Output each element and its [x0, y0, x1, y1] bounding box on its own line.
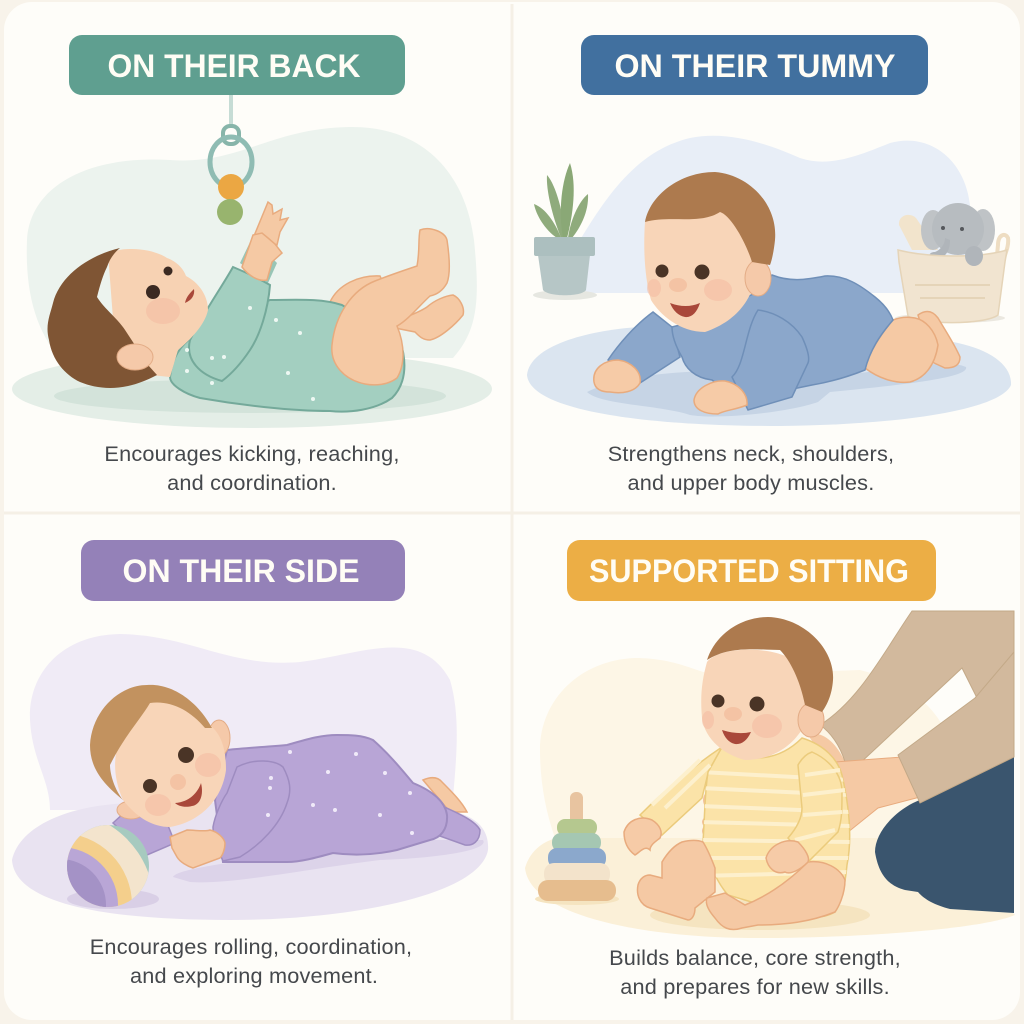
hands [624, 818, 661, 855]
right leg [706, 862, 845, 930]
thigh [865, 317, 938, 382]
ear [745, 260, 771, 296]
ear [117, 344, 153, 370]
background blob [30, 634, 457, 810]
heading: supported sitting: SUPPORTED SITTING [589, 553, 909, 589]
left arm [640, 747, 722, 835]
sweater lower arm [898, 652, 1014, 803]
icon: stacking rings [535, 792, 619, 905]
floor shadow [650, 900, 870, 930]
front hand [242, 233, 282, 280]
nose [669, 278, 687, 292]
caption: Encourages rolling, coordination, [90, 934, 412, 959]
mouth [175, 783, 202, 807]
lower foot sleeve [437, 805, 480, 845]
face [644, 194, 758, 332]
upper arm [213, 761, 290, 861]
onesie [170, 300, 404, 412]
nose [170, 774, 186, 790]
caption: Builds balance, core strength, [609, 945, 901, 970]
floor mat [525, 838, 1015, 938]
floor mat [12, 350, 492, 428]
baby sitting [624, 617, 850, 930]
eyes [143, 779, 157, 793]
baby on side [90, 685, 480, 868]
caption: and upper body muscles. [628, 470, 874, 495]
baby on back [48, 202, 463, 412]
floor mat [527, 327, 1011, 426]
nose [724, 707, 742, 721]
back leg [330, 276, 463, 340]
dots [266, 750, 414, 835]
eyes [712, 694, 724, 708]
heading: on their back [69, 35, 405, 95]
caption: and coordination. [167, 470, 337, 495]
caption: and exploring movement. [130, 963, 378, 988]
right arm [788, 752, 842, 862]
floor mat [12, 802, 488, 920]
onesie dots [185, 306, 315, 401]
mouth [722, 730, 751, 744]
eyes [146, 285, 160, 299]
back arm [113, 812, 175, 855]
background blob [27, 127, 477, 358]
mouth [185, 289, 194, 303]
caption: Encourages kicking, reaching, [104, 441, 400, 466]
foot [423, 778, 467, 812]
panel: on their side [0, 540, 488, 999]
panel: on their tummy [527, 35, 1011, 495]
mouth [670, 303, 700, 317]
arm sleeve [189, 267, 270, 381]
jeans [875, 757, 1014, 913]
body [215, 735, 447, 862]
adult caregiver [702, 611, 1014, 913]
stripes [700, 772, 850, 876]
face [115, 698, 226, 827]
panel: supported sitting [525, 540, 1015, 999]
ear [798, 703, 824, 737]
left leg [638, 840, 715, 920]
caption: and prepares for new skills. [620, 974, 890, 999]
baby on tummy [594, 172, 960, 414]
background blob [580, 136, 970, 293]
caption: Strengthens neck, shoulders, [608, 441, 894, 466]
background blob [540, 658, 960, 838]
foot [918, 312, 960, 368]
face [701, 650, 811, 760]
hair [48, 248, 157, 388]
heading: on their tummy [581, 35, 928, 95]
hands [594, 360, 640, 393]
ears [208, 720, 230, 756]
front leg [332, 229, 449, 385]
back hand [254, 202, 288, 245]
back hand [808, 734, 845, 775]
onesie [703, 738, 850, 917]
cheek [146, 298, 180, 324]
icon: potted plant [533, 163, 597, 300]
cheeks [704, 279, 732, 301]
icon: hanging toy [210, 95, 252, 225]
hair [645, 172, 775, 265]
face [108, 249, 208, 377]
floor shadow [173, 840, 484, 882]
front arm [732, 310, 809, 410]
icon: striped ball [67, 825, 149, 907]
icon: basket with elephant [895, 203, 1008, 323]
body [672, 275, 893, 400]
heading: on their side: ON THEIR SIDE [122, 553, 360, 589]
floor shadow [587, 364, 966, 417]
sweater torso and upper arm [820, 611, 1014, 765]
hand [170, 830, 225, 868]
heading: on their back: ON THEIR BACK [108, 48, 360, 84]
fingers [702, 791, 798, 837]
heading: on their tummy: ON THEIR TUMMY [614, 48, 896, 84]
heading: on their side [81, 540, 405, 601]
cheeks [752, 714, 782, 738]
cheeks [195, 753, 221, 777]
heading: supported sitting [567, 540, 936, 601]
back sleeve [240, 238, 277, 283]
eyes [656, 264, 668, 278]
left arm [608, 312, 680, 383]
hair [90, 685, 212, 800]
panel: on their back [12, 35, 492, 495]
hair [707, 617, 833, 712]
ball shadow [67, 889, 159, 909]
hand on back [835, 757, 920, 837]
